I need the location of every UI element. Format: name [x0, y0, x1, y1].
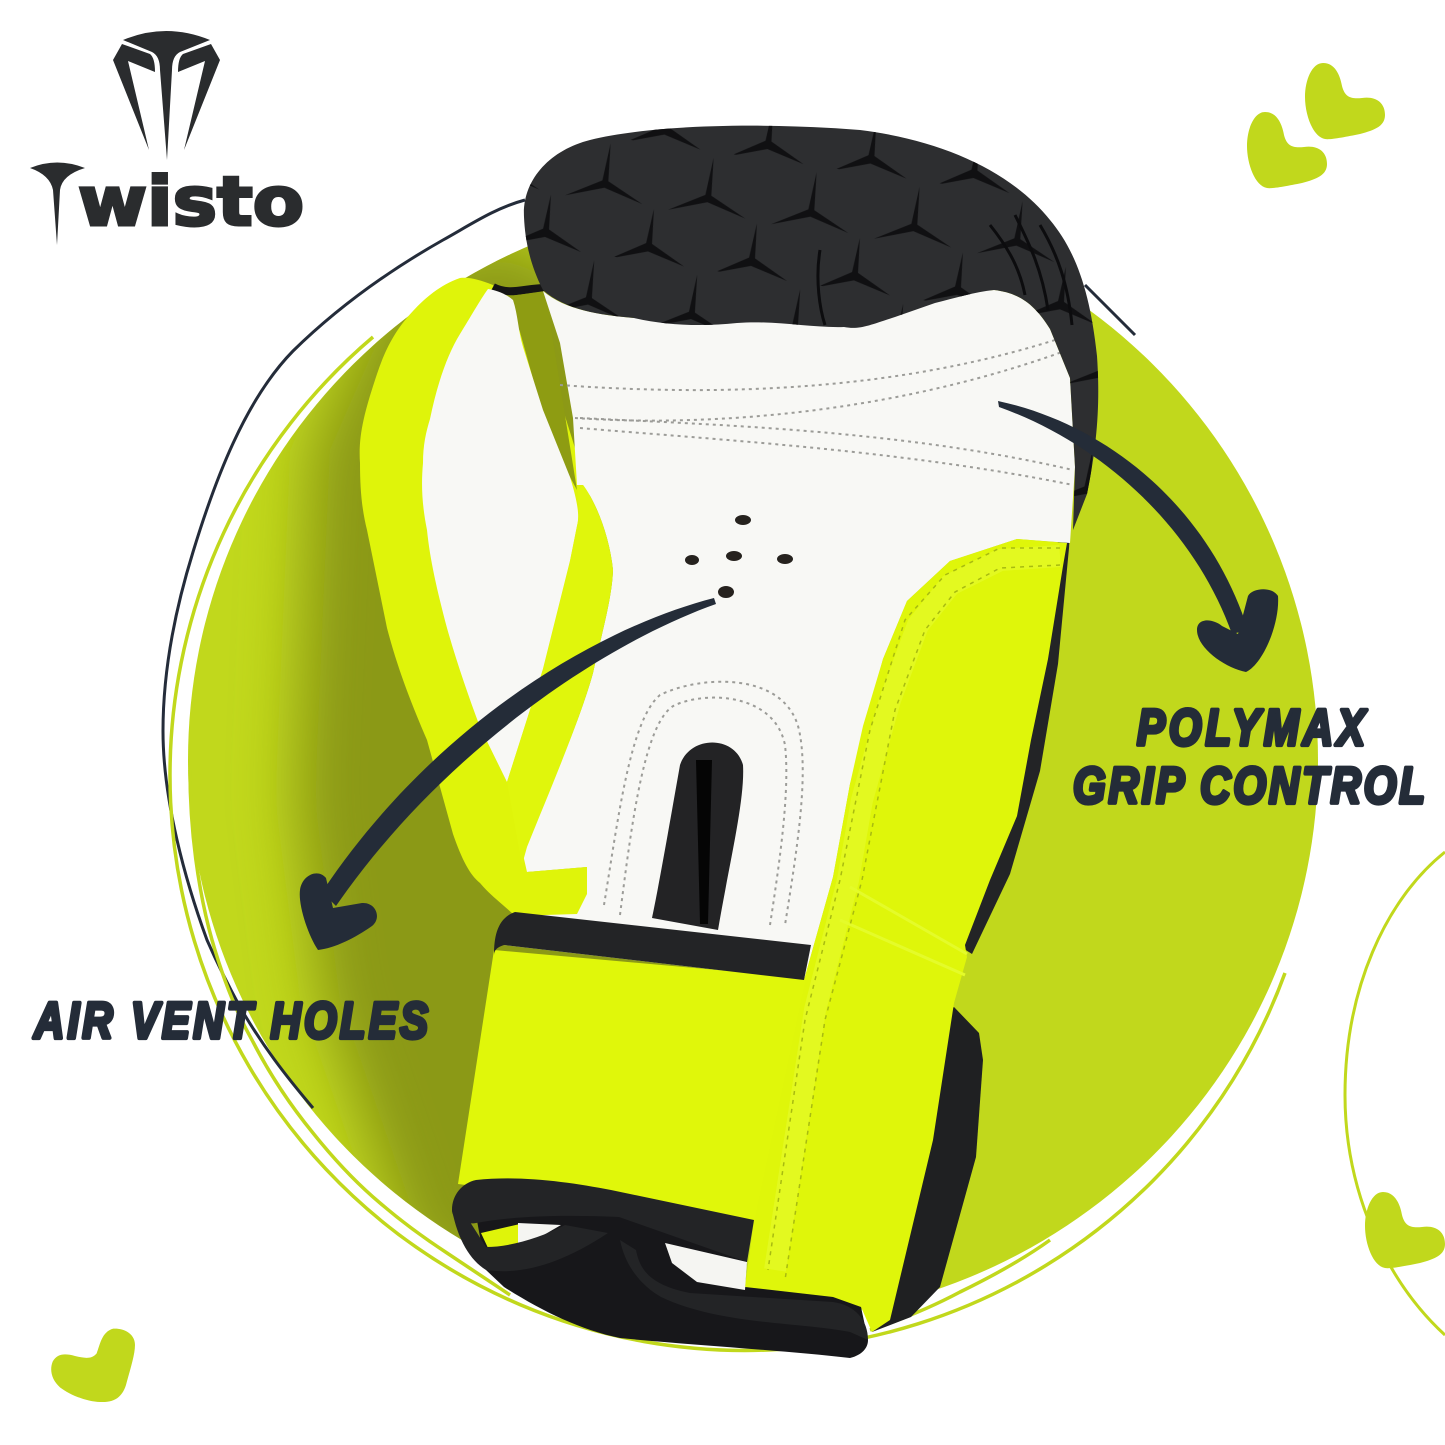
glove: cuff strap [458, 950, 806, 1222]
glove: palm stitching [560, 340, 1073, 925]
arrow: polymax [998, 401, 1278, 672]
glove: thumb outer [360, 278, 613, 914]
glove: yellow strip beside thumb [507, 485, 613, 865]
glove shadow on circle [295, 230, 720, 1330]
glove: fist back [524, 126, 1098, 530]
glove: gap between thumb and palm [510, 291, 577, 490]
glove: palm [504, 290, 1075, 980]
label: polymax grip control: GRIP CONTROL [1073, 757, 1425, 814]
right partial ring [1345, 852, 1445, 1335]
glove: bottom lining [476, 1190, 868, 1358]
glove: air vent holes [685, 515, 793, 598]
glove: thumb slot [652, 742, 743, 930]
glove: yellow palm side panel [745, 539, 1067, 1332]
thin green outer ring [170, 337, 1285, 1350]
glove: cuff inner slivers [481, 1224, 520, 1248]
label: air vent holes: AIR VENT HOLES [33, 992, 428, 1049]
logo: wisto [78, 163, 304, 242]
logo [30, 31, 304, 245]
glove: panel seam highlight [775, 556, 1060, 1270]
glove: fist star texture [524, 126, 1098, 530]
label: polymax grip control [1073, 699, 1425, 814]
glove: thumb pad [422, 289, 578, 782]
boxing glove [360, 126, 1098, 1358]
glove: cuff top binding [494, 912, 811, 980]
glove: cuff tab [510, 867, 587, 916]
glove: cuff loop right [620, 1240, 868, 1340]
label: polymax grip control: POLYMAX [1137, 699, 1367, 756]
glove: fist folds [818, 215, 1072, 325]
icon: heart bottom left [51, 1329, 135, 1402]
arrow: air vent [300, 598, 716, 950]
glove: panel stitches [768, 548, 1060, 1280]
icon: heart right [1365, 1192, 1445, 1268]
glove: wrist black edge [850, 1007, 983, 1332]
green background circle [188, 200, 1318, 1320]
glove: cuff loop left [452, 1210, 608, 1271]
thin navy ring [163, 200, 1135, 1108]
glove: right dark back edge [950, 530, 1070, 954]
thin green inner ring [190, 770, 1050, 1330]
glove: wrist cord [493, 287, 545, 291]
icon: hearts top right [1247, 63, 1385, 188]
glove: cuff bottom binding [452, 1178, 754, 1262]
